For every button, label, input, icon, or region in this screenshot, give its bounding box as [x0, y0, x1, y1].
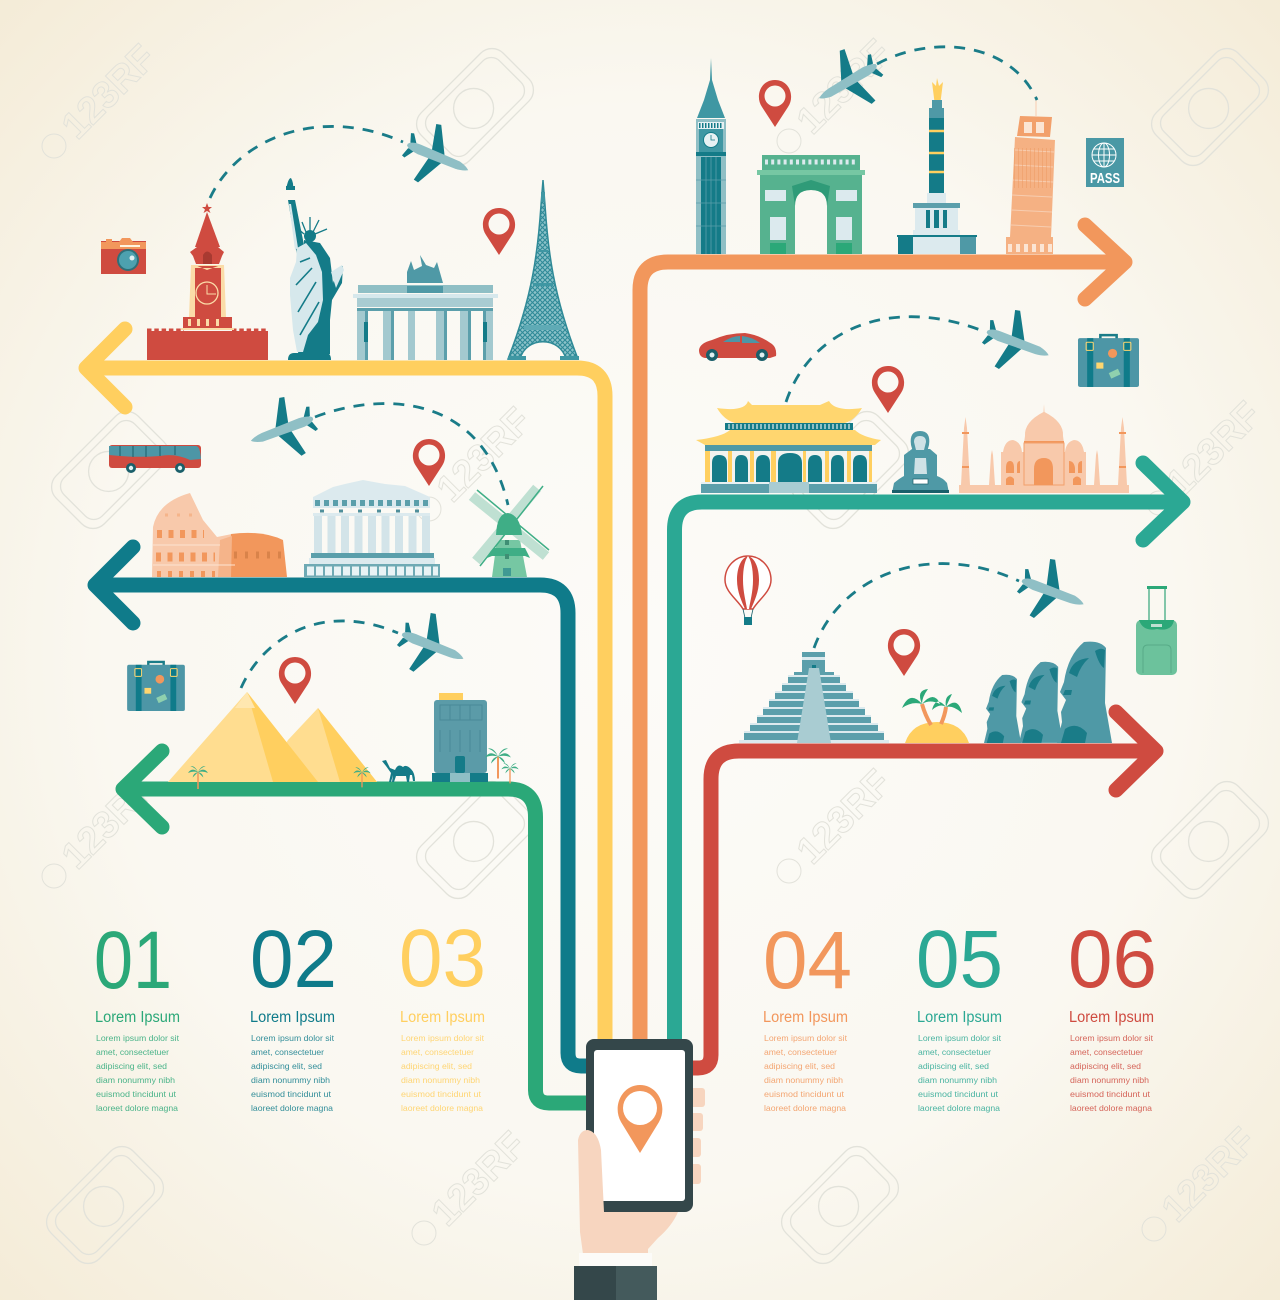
text block: 06: euismod tincidunt ut — [1070, 1089, 1151, 1099]
flight path — [315, 404, 508, 505]
icon: location pin — [872, 366, 904, 413]
icon: Leaning Tower of Pisa — [1006, 96, 1055, 254]
route lines and arrows — [86, 225, 1183, 1103]
text block: 03: laoreet dolore magna — [401, 1103, 483, 1113]
text block: 05: diam nonummy nibh — [918, 1075, 997, 1085]
text block: 06: diam nonummy nibh — [1070, 1075, 1149, 1085]
panel: route 5 landmarks — [696, 302, 1139, 493]
text block: 03 — [399, 913, 486, 1113]
text block: 04: euismod tincidunt ut — [764, 1089, 845, 1099]
text block: 05: amet, consectetuer — [918, 1047, 991, 1057]
icon: plane — [975, 302, 1060, 383]
text block: 01: diam nonummy nibh — [96, 1075, 175, 1085]
text block: 03: adipiscing elit, sed — [401, 1061, 472, 1071]
text block: 04: 04 — [763, 915, 852, 1006]
text block: 05: 05 — [916, 914, 1003, 1005]
text block: 04: laoreet dolore magna — [764, 1103, 846, 1113]
icon: trolley luggage — [1136, 586, 1177, 675]
icon: location pin — [888, 629, 920, 676]
icon: Brandenburg Gate — [353, 255, 498, 360]
icon: Victory Column — [897, 78, 977, 254]
watermark stamps: 123RF — [789, 32, 899, 142]
text block: 06: 06 — [1068, 914, 1157, 1005]
arrow: green route — [123, 751, 592, 1103]
text block: 01: Lorem Ipsum — [95, 1009, 180, 1026]
icon: plane — [240, 389, 325, 471]
text block: 06: Lorem ipsum dolor sit — [1070, 1033, 1154, 1043]
watermark stamps: 123RF — [1154, 1120, 1264, 1230]
text block: 06 — [1068, 914, 1157, 1113]
flight path — [210, 126, 403, 198]
text block: 05 — [916, 914, 1003, 1113]
text block: 04: Lorem ipsum dolor sit — [764, 1033, 848, 1043]
icon: seated Buddha — [892, 431, 949, 493]
watermark stamps: 123RF — [1159, 394, 1269, 504]
icon: fingers — [688, 1088, 705, 1184]
icon: Taj Mahal — [959, 404, 1129, 493]
text block: 02: Lorem Ipsum — [250, 1009, 335, 1026]
icon: passport: PASS — [1090, 170, 1120, 187]
arrow: orange route — [640, 225, 1125, 1048]
icon: Big Ben — [696, 58, 726, 254]
arrow: teal route — [95, 547, 592, 1066]
watermark stamps: 123RF — [424, 1124, 534, 1234]
text block: 06: adipiscing elit, sed — [1070, 1061, 1141, 1071]
text block: 01: laoreet dolore magna — [96, 1103, 178, 1113]
flight path — [241, 621, 398, 688]
text block: 02: euismod tincidunt ut — [251, 1089, 332, 1099]
icon: Forbidden City palace — [696, 401, 881, 493]
text block: 02: diam nonummy nibh — [251, 1075, 330, 1085]
icon: location pin — [413, 439, 445, 486]
arrow: teal green route — [674, 463, 1183, 1048]
icon: windmill — [472, 486, 549, 577]
text block: 04: diam nonummy nibh — [764, 1075, 843, 1085]
watermark stamps: 123RF — [429, 400, 539, 510]
icon: Statue of Liberty — [286, 178, 344, 360]
text block: 01 — [94, 915, 180, 1113]
text block: 03: 03 — [399, 913, 486, 1004]
icon: plane — [395, 116, 480, 198]
text block: 02: 02 — [250, 914, 337, 1005]
text block: 03: euismod tincidunt ut — [401, 1089, 482, 1099]
flight path — [786, 317, 983, 402]
text block: 05: euismod tincidunt ut — [918, 1089, 999, 1099]
panel: route 3 landmarks — [101, 116, 579, 360]
icon: pyramids — [168, 692, 377, 782]
icon: Moai heads — [984, 642, 1112, 743]
hand holding phone — [574, 1039, 705, 1300]
icon: small palms — [188, 766, 371, 789]
text block: 05: laoreet dolore magna — [918, 1103, 1000, 1113]
watermark stamps: 123RF — [789, 762, 899, 872]
icon: location pin — [279, 657, 311, 704]
icon: camel — [382, 760, 415, 782]
text block: 05: Lorem Ipsum — [917, 1009, 1002, 1026]
panel: route 2 landmarks — [109, 389, 549, 577]
text block: 04: adipiscing elit, sed — [764, 1061, 835, 1071]
text block: 02 — [250, 914, 337, 1113]
icon: shirt cuff — [579, 1253, 652, 1266]
icon: palm island — [902, 689, 969, 743]
text block: 05: Lorem ipsum dolor sit — [918, 1033, 1002, 1043]
icon: suitcase — [127, 662, 185, 711]
text block: 04: Lorem Ipsum — [763, 1009, 848, 1026]
text block: 03: amet, consectetuer — [401, 1047, 474, 1057]
text block: 01: amet, consectetuer — [96, 1047, 169, 1057]
icon: hot air balloon — [725, 556, 771, 625]
arrow: yellow route — [86, 329, 605, 1048]
arrow: red route — [688, 712, 1156, 1068]
text block: 04: amet, consectetuer — [764, 1047, 837, 1057]
icon: suit sleeve — [574, 1266, 657, 1300]
icon: plane — [390, 605, 475, 687]
flight path — [877, 47, 1037, 100]
icon: bus — [109, 445, 201, 473]
icon: Parthenon — [304, 480, 440, 577]
icon: camera — [101, 238, 146, 274]
icon: Chichen Itza pyramid — [739, 652, 889, 743]
icon: suitcase — [1078, 335, 1139, 387]
flight path — [814, 564, 1019, 648]
icon: location pin — [483, 208, 515, 255]
icon: hotel palms — [485, 748, 519, 783]
icon: passport — [1086, 138, 1124, 187]
panel: route 4 landmarks — [696, 38, 1124, 254]
watermark stamps: 123RF — [54, 37, 164, 147]
icon: plane — [1010, 551, 1095, 632]
text block: 01: Lorem ipsum dolor sit — [96, 1033, 180, 1043]
text block: 06: Lorem Ipsum — [1069, 1009, 1154, 1026]
icon: Arc de Triomphe — [757, 155, 865, 254]
icon: plane — [804, 38, 893, 126]
text block: 06: amet, consectetuer — [1070, 1047, 1143, 1057]
watermark stamps: 123RF — [54, 767, 164, 877]
text block: 01: adipiscing elit, sed — [96, 1061, 167, 1071]
panel: route 1 landmarks — [127, 605, 519, 789]
text block: 02: amet, consectetuer — [251, 1047, 324, 1057]
text block: 02: Lorem ipsum dolor sit — [251, 1033, 335, 1043]
icon: car — [699, 333, 776, 361]
icon: Eiffel Tower — [508, 180, 579, 360]
text block: 03: Lorem ipsum dolor sit — [401, 1033, 485, 1043]
text block: 01: euismod tincidunt ut — [96, 1089, 177, 1099]
text block: 01: 01 — [94, 915, 172, 1006]
icon: Spasskaya tower — [147, 203, 268, 360]
text block: 05: adipiscing elit, sed — [918, 1061, 989, 1071]
text block: 06: laoreet dolore magna — [1070, 1103, 1152, 1113]
text block: 04 — [763, 915, 852, 1113]
text block: 03: diam nonummy nibh — [401, 1075, 480, 1085]
icon: phone — [586, 1039, 693, 1212]
text block: 03: Lorem Ipsum — [400, 1009, 485, 1026]
panel: route 6 landmarks — [725, 551, 1177, 743]
icon: location pin — [759, 80, 791, 127]
icon: palm and thumb — [578, 1130, 678, 1254]
text block: 02: adipiscing elit, sed — [251, 1061, 322, 1071]
text block: 02: laoreet dolore magna — [251, 1103, 333, 1113]
icon: Colosseum — [152, 493, 287, 577]
icon: hotel — [432, 693, 488, 782]
